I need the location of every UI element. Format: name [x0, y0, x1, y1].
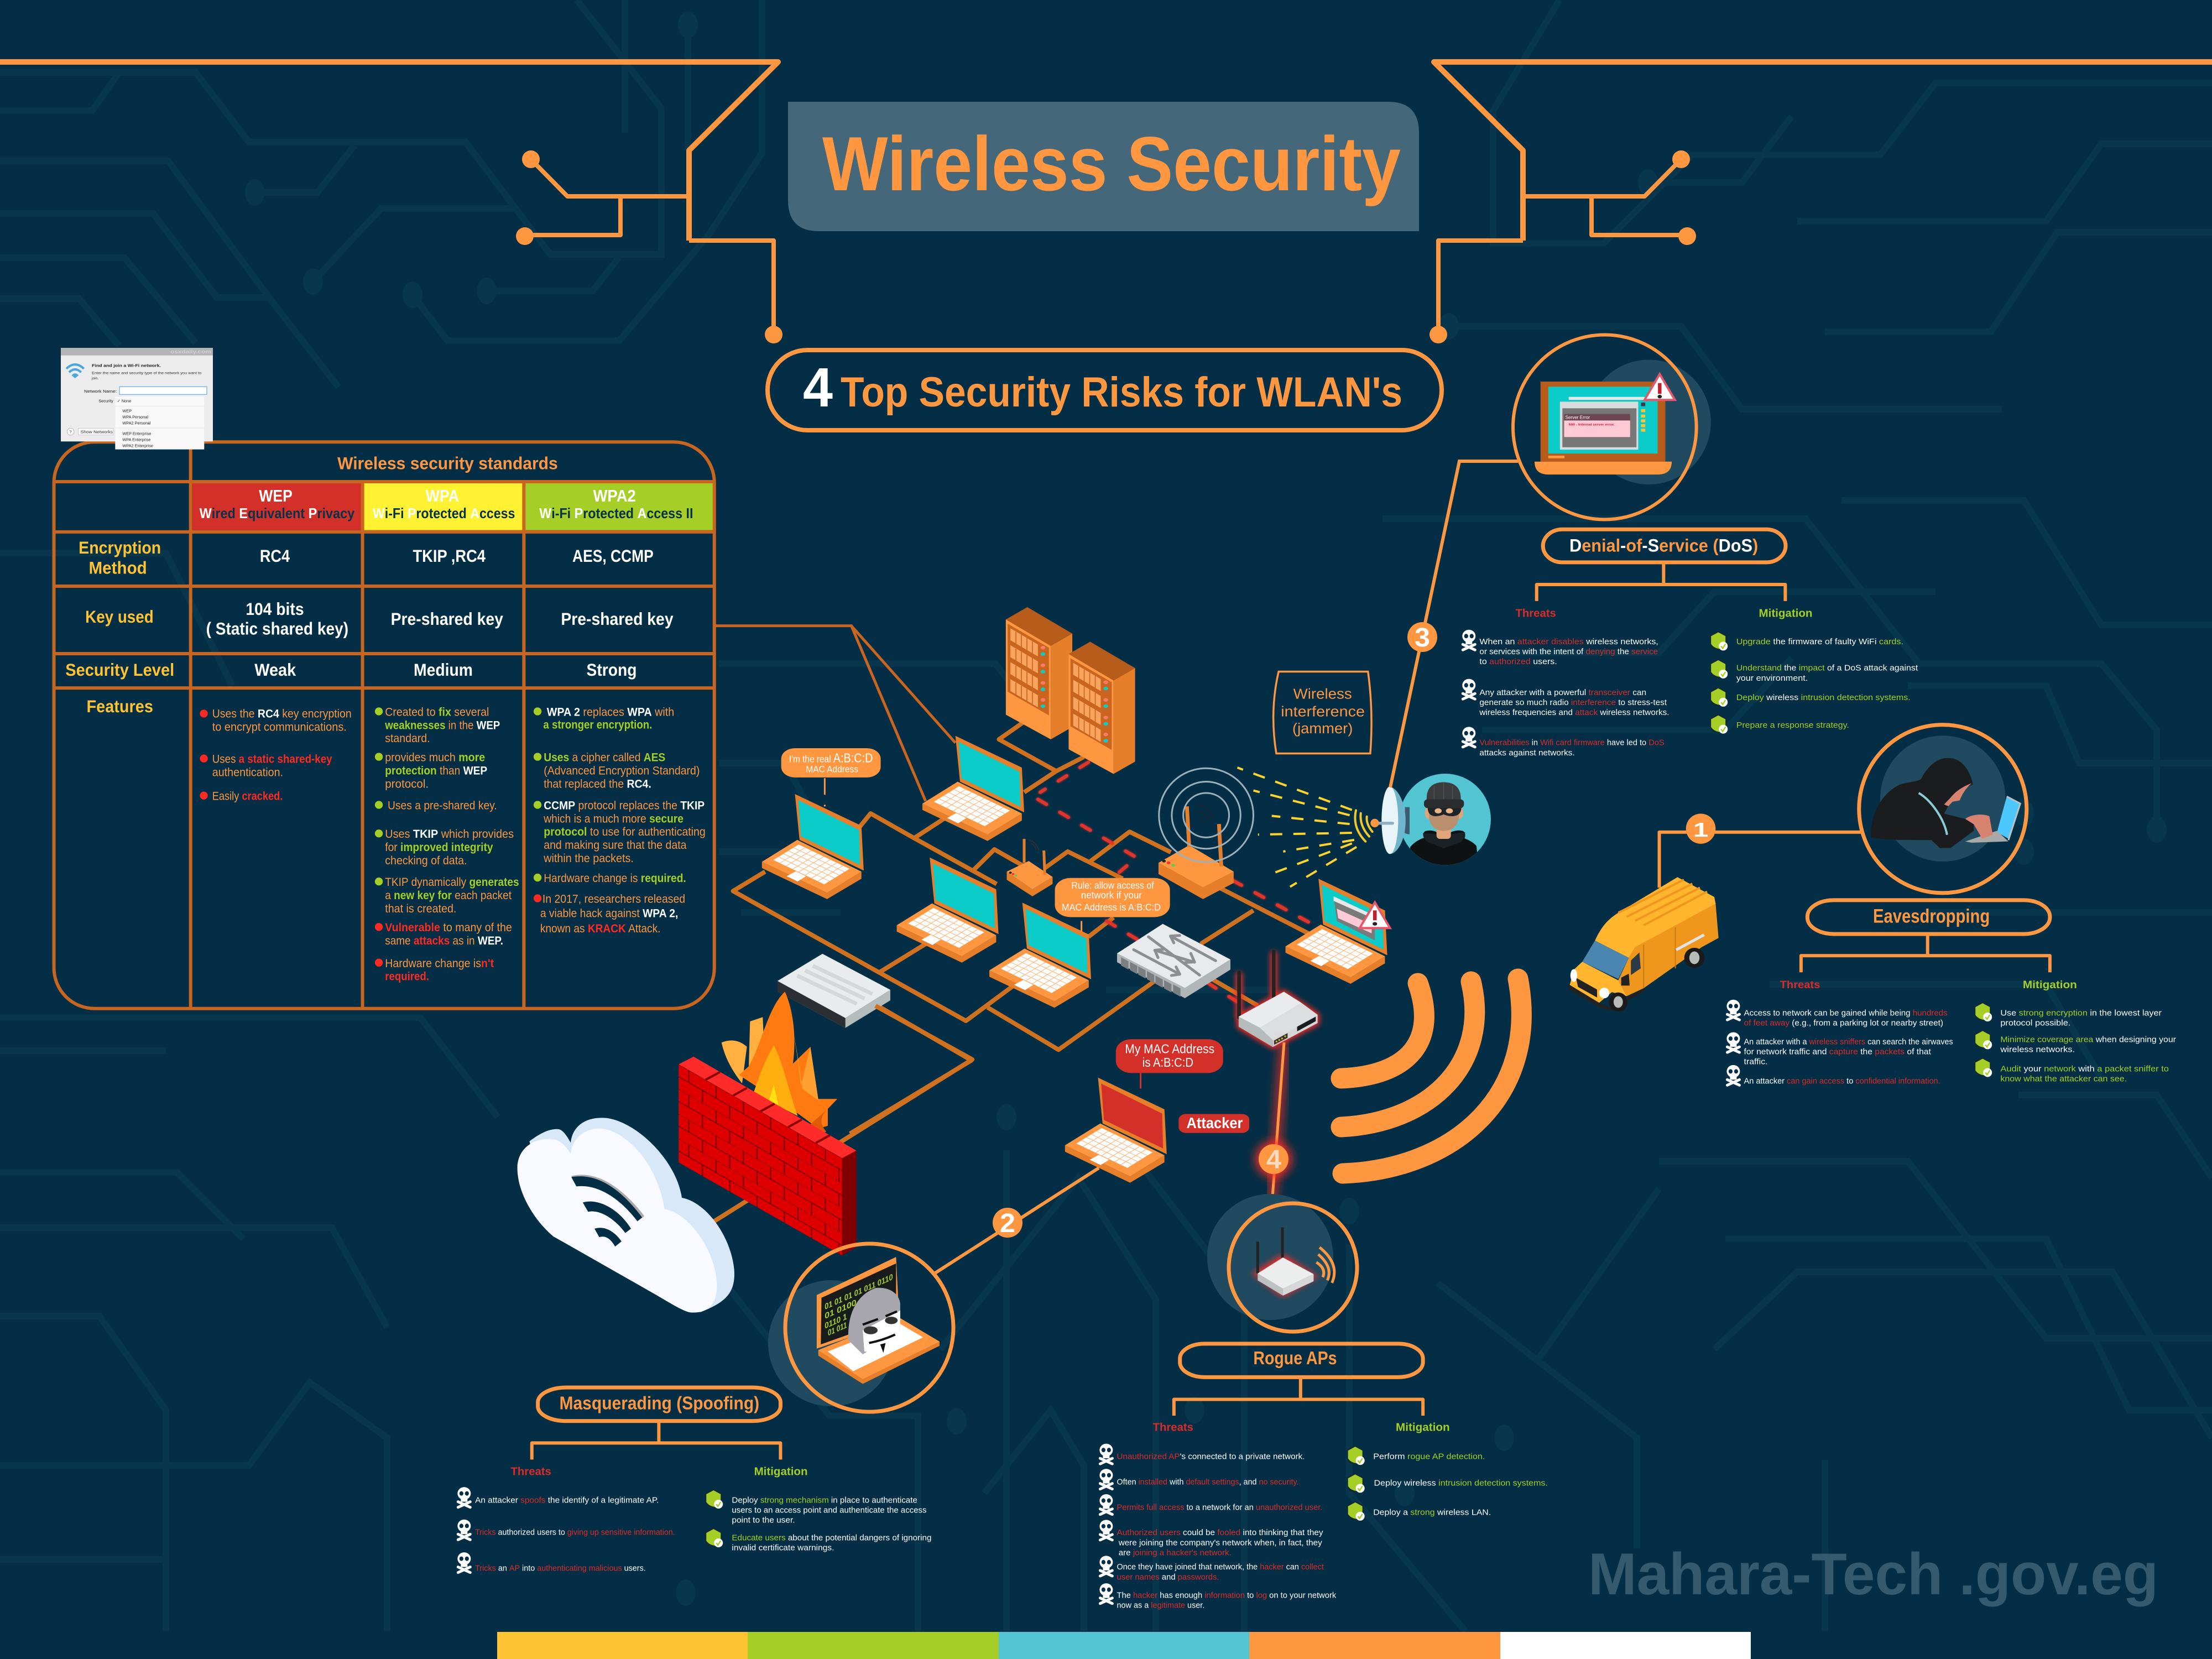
Rogue APs mitigation list: Deploy a strong wireless LAN.: [1373, 1508, 1491, 1517]
subtitle: [768, 350, 1442, 430]
panel: wireless security standards table: [54, 442, 714, 1009]
jamming signal rays: [1237, 768, 1357, 887]
table heading: Wireless security standards: [337, 453, 558, 473]
speech bubble: firewall rule: [1055, 878, 1170, 932]
DoS icon: [1513, 335, 1711, 519]
WPA features: provides much more: [385, 750, 485, 764]
WPA features: protocol.: [385, 777, 429, 790]
screenshot: Mac Wi-Fi join dialog: Network Name:: [84, 389, 117, 394]
Eavesdropping tree connector: [1801, 934, 2050, 972]
WPA features: required.: [385, 970, 429, 983]
Rogue APs threats list: were joining the company's network when, in fact, they: [1118, 1538, 1322, 1547]
DoS threats list: or services with the intent of denying the service: [1479, 648, 1658, 656]
speech bubble: real MAC: I'm the real A:B:C:D: [789, 751, 873, 765]
bottom colour bar: [497, 1632, 1751, 1659]
WPA2 features: which is a much more secure: [543, 812, 684, 825]
hacker icon: [1859, 725, 2027, 893]
eavesdropping connector with badge 1: [1660, 813, 1861, 888]
screenshot: Mac Wi-Fi join dialog: ✓ None: [117, 398, 131, 403]
Masquerading tree connector: [532, 1421, 780, 1459]
Rogue APs threats list: Once they have joined that network, the hacker can collect: [1117, 1563, 1324, 1572]
DoS icon: Server Error: [1565, 415, 1590, 420]
Eavesdropping threats list: traffic.: [1744, 1057, 1767, 1066]
WPA2 features: In 2017, researchers released: [542, 892, 685, 905]
flames: [722, 992, 837, 1134]
Eavesdropping threats list: of feet away (e.g., from a parking lot or nearby street): [1744, 1019, 1943, 1027]
Eavesdropping threats list: Access to network can be gained while being hundreds: [1744, 1009, 1948, 1018]
WPA2 features: and making sure that the data: [544, 838, 687, 852]
WPA features: for improved integrity: [385, 841, 493, 854]
wire to firewall: [713, 1006, 972, 1222]
Rogue APs heading: [1180, 1344, 1423, 1377]
row labels: [65, 538, 174, 716]
Rogue APs threats list: Authorized users could be fooled into thinking that they: [1117, 1528, 1323, 1537]
WPA features: weaknesses in the WEP: [384, 718, 500, 732]
Rogue APs threats list: Permits full access to a network for an unauthorized user.: [1117, 1503, 1322, 1512]
screenshot: Mac Wi-Fi join dialog: [61, 348, 213, 450]
WPA2 features: WPA 2 replaces WPA with: [547, 705, 674, 718]
DoS threats list: [1462, 630, 1670, 758]
victim laptop with warning: [1286, 879, 1390, 984]
WPA features: protection than WEP: [385, 764, 487, 777]
row values: [206, 546, 674, 680]
DoS mitigation list: Understand the impact of a DoS attack against: [1736, 664, 1918, 672]
row values: Strong: [587, 660, 637, 680]
screenshot: Mac Wi-Fi join dialog: WPA2 Personal: [122, 421, 151, 426]
right circuit header decoration: [1430, 62, 2212, 343]
WPA features: checking of data.: [385, 854, 467, 867]
WEP features: Uses a static shared-key: [212, 753, 332, 766]
DoS threats list: When an attacker disables wireless networks,: [1479, 638, 1658, 646]
laptop with anonymous mask: [817, 1257, 940, 1384]
threats heading: Threats: [1780, 979, 1820, 990]
brick firewall: [679, 1057, 857, 1255]
screenshot: Mac Wi-Fi join dialog: WEP Enterprise: [122, 431, 151, 436]
panel: Masquerading (Spoofing): [457, 1387, 931, 1573]
screenshot: Mac Wi-Fi join dialog: ?: [70, 429, 72, 434]
threats heading: Threats: [511, 1465, 551, 1478]
WPA features: Uses TKIP which provides: [385, 827, 514, 841]
Eavesdropping mitigation list: wireless networks.: [2000, 1045, 2075, 1054]
WPA2 header: Wi-Fi Protected Access II: [539, 506, 693, 521]
attacker speech bubble: [1116, 1039, 1223, 1088]
jammer operator with dish: [1355, 774, 1491, 867]
Masquerading mitigation list: users to an access point and authenticate the access: [732, 1506, 926, 1515]
subtitle: Top Security Risks for WLAN's: [841, 369, 1402, 416]
Eavesdropping heading: [1807, 900, 2050, 934]
DoS mitigation list: Upgrade the firmware of faulty WiFi cards.: [1736, 638, 1903, 646]
attacker connector with badge 2: 2: [1000, 1209, 1015, 1238]
screenshot: Mac Wi-Fi join dialog: Enter the name and security type of the network you want to: [92, 372, 202, 375]
WPA features: Hardware change isn't: [385, 957, 494, 970]
DoS heading: Denial-of-Service (DoS): [1569, 535, 1758, 556]
mini rogue router: [1253, 1227, 1334, 1297]
laptop: [989, 902, 1091, 1008]
Eavesdropping mitigation list: protocol possible.: [2000, 1019, 2070, 1027]
Masquerading mitigation list: invalid certificate warnings.: [732, 1543, 834, 1552]
speech bubble: firewall rule: Rule: allow access of: [1071, 880, 1154, 891]
WEP features: Uses the RC4 key encryption: [212, 707, 352, 721]
mitigation heading: Mitigation: [754, 1465, 808, 1478]
WPA features: Created to fix several: [385, 705, 489, 718]
red attack path dashes: [1038, 762, 1313, 1009]
firewall and cloud: [518, 992, 972, 1313]
WPA header: [373, 487, 515, 521]
row values: Pre-shared key: [391, 609, 503, 629]
WPA2 features: Uses a cipher called AES: [544, 750, 665, 764]
rogue AP icon: [1207, 1194, 1357, 1332]
Masquerading mitigation list: point to the user.: [732, 1516, 795, 1525]
DoS threats list: to authorized users.: [1479, 658, 1557, 666]
Masquerading heading: Masquerading (Spoofing): [560, 1392, 759, 1413]
WPA2 features: Hardware change is required.: [544, 872, 686, 885]
WPA2 features: known as KRACK Attack.: [540, 922, 660, 935]
WEP features: to encrypt communications.: [212, 720, 347, 733]
network switch: [1117, 924, 1230, 998]
screenshot: Mac Wi-Fi join dialog: WPA2 Enterprise: [122, 443, 153, 448]
small router: [1007, 839, 1052, 896]
DoS threats list: Vulnerabilities in Wifi card firmware have led to DoS: [1479, 739, 1665, 747]
WPA2 features: protocol to use for authenticating: [544, 825, 706, 838]
rogue connector with badge 4: [1256, 1042, 1291, 1204]
wireless interference jammer label: [1274, 672, 1371, 754]
attacker laptop: [1065, 1078, 1167, 1183]
WPA features: same attacks as in WEP.: [385, 934, 503, 947]
row values: AES, CCMP: [572, 546, 654, 566]
Eavesdropping mitigation list: [1974, 1001, 2176, 1083]
screenshot: Mac Wi-Fi join dialog: WPA Personal: [122, 415, 148, 420]
Masquerading heading: [538, 1387, 780, 1421]
DoS threats list: Any attacker with a powerful transceiver can: [1479, 688, 1646, 697]
DoS mitigation list: [1709, 630, 1918, 734]
delivery van: [1569, 877, 1719, 1012]
DoS threats list: attacks against networks.: [1479, 749, 1575, 758]
speech bubble: firewall rule: network if your: [1081, 890, 1142, 901]
attacker label: Attacker: [1186, 1114, 1243, 1131]
Rogue APs mitigation list: Deploy wireless intrusion detection systems.: [1374, 1479, 1548, 1488]
WPA features: TKIP dynamically generates: [385, 875, 519, 889]
screenshot: Mac Wi-Fi join dialog: Show Networks: [81, 429, 113, 434]
laptop: [762, 794, 864, 899]
laptop with anonymous mask: 01 011: [828, 1319, 847, 1338]
WPA2 features: within the packets.: [543, 852, 634, 865]
laptop with anonymous mask: 01 01 01 01 011 0110: [825, 1271, 893, 1312]
mitigation heading: Mitigation: [1759, 607, 1812, 619]
Eavesdropping mitigation list: Minimize coverage area when designing your: [2000, 1035, 2176, 1044]
Rogue APs threats list: Often installed with default settings, and no security.: [1117, 1478, 1299, 1486]
wireless interference jammer label: interference: [1281, 704, 1365, 720]
screenshot: Mac Wi-Fi join dialog: WPA Enterprise: [122, 437, 151, 442]
Eavesdropping mitigation list: Audit your network with a packet sniffer to: [2000, 1065, 2169, 1073]
WPA2 features: a stronger encryption.: [543, 718, 652, 731]
speech bubble: real MAC: MAC Address: [806, 765, 858, 775]
Rogue APs heading: Rogue APs: [1253, 1348, 1337, 1368]
big orange wifi waves: [1341, 979, 1521, 1173]
WPA features: Vulnerable to many of the: [385, 921, 512, 934]
Rogue APs threats list: [1099, 1444, 1337, 1610]
Eavesdropping threats list: An attacker with a wireless sniffers can search the airwaves: [1744, 1037, 1953, 1046]
masked man: [1410, 782, 1478, 867]
WPA features: [375, 705, 519, 983]
mitigation heading: Mitigation: [1396, 1421, 1450, 1433]
WPA header: Wi-Fi Protected Access: [373, 506, 515, 521]
Rogue APs tree connector: [1174, 1378, 1423, 1416]
Rogue APs threats list: The hacker has enough information to log on to your network: [1117, 1591, 1337, 1600]
panel: Eavesdropping: [1569, 725, 2176, 1086]
Eavesdropping threats list: An attacker can gain access to confidential information.: [1744, 1077, 1940, 1086]
screenshot: Mac Wi-Fi join dialog: Security: [98, 398, 113, 403]
row labels: Features: [87, 696, 153, 716]
WPA2 features: [534, 705, 706, 935]
row labels: Key used: [85, 607, 154, 627]
laptop: [922, 736, 1024, 841]
server racks: [1006, 607, 1135, 774]
Eavesdropping threats list: for network traffic and capture the packets of that: [1744, 1047, 1931, 1056]
WEP header: Wired Equivalent Privacy: [200, 506, 355, 521]
row values: TKIP ,RC4: [413, 546, 486, 566]
Rogue APs threats list: now as a legitimate user.: [1117, 1601, 1204, 1610]
WPA features: Uses a pre-shared key.: [388, 799, 497, 812]
attacker speech bubble: is A:B:C:D: [1142, 1055, 1193, 1070]
row values: Medium: [414, 660, 473, 680]
laptop with anonymous mask: 0110 1: [825, 1311, 847, 1331]
speech bubble: real MAC: [781, 748, 881, 806]
threats heading: Threats: [1153, 1421, 1193, 1433]
cloud icon: [518, 1118, 734, 1313]
WPA header: WPA: [426, 487, 459, 505]
spoofing icon: [768, 1244, 953, 1412]
rogue router: [1239, 952, 1318, 1047]
title: [788, 102, 1419, 231]
left circuit header decoration: [0, 62, 782, 343]
WEP header: [200, 487, 355, 521]
DoS heading: [1543, 529, 1786, 562]
wireless interference jammer label: Wireless: [1293, 686, 1352, 702]
Masquerading mitigation list: Deploy strong mechanism in place to authenticate: [732, 1495, 917, 1505]
attacker label: [1178, 1114, 1249, 1133]
DoS icon: 500 - Internal server error.: [1569, 424, 1615, 427]
panel: Rogue APs: [1099, 1344, 1548, 1610]
DoS connector with badge 3: [1390, 461, 1518, 787]
Rogue APs threats list: are joining a hacker's network.: [1119, 1548, 1232, 1557]
DoS connector with badge 3: 3: [1415, 623, 1430, 653]
speech bubble: firewall rule: MAC Address is A:B:C:D: [1062, 902, 1161, 913]
DoS mitigation list: Deploy wireless intrusion detection systems.: [1736, 693, 1911, 702]
laptop: [897, 858, 999, 963]
DoS tree connector: [1537, 562, 1785, 601]
Rogue APs threats list: user names and passwords.: [1117, 1573, 1219, 1582]
table grid: [54, 442, 714, 1009]
rogue connector with badge 4: 4: [1266, 1145, 1281, 1175]
row labels: Method: [89, 558, 147, 578]
screenshot: Mac Wi-Fi join dialog: osxdaily.com: [170, 349, 211, 354]
WPA features: that is created.: [385, 902, 456, 915]
mitigation heading: Mitigation: [2023, 979, 2077, 990]
WPA2 header: WPA2: [593, 487, 636, 505]
WPA features: a new key for each packet: [385, 889, 512, 902]
screenshot: Mac Wi-Fi join dialog: join.: [91, 377, 98, 380]
panel: Denial-of-Service: [1462, 335, 1918, 758]
Eavesdropping mitigation list: Use strong encryption in the lowest layer: [2000, 1009, 2162, 1018]
Rogue APs mitigation list: [1347, 1445, 1548, 1521]
WEP features: [200, 707, 352, 803]
WPA2 features: that replaced the RC4.: [544, 777, 651, 790]
row values: Weak: [254, 660, 296, 680]
eavesdropping connector with badge 1: 1: [1693, 819, 1708, 841]
WPA features: standard.: [385, 732, 430, 745]
Rogue APs mitigation list: Perform rogue AP detection.: [1373, 1452, 1485, 1461]
WPA2 features: CCMP protocol replaces the TKIP: [544, 799, 705, 812]
subtitle: 4: [803, 357, 833, 419]
WEP features: Easily cracked.: [212, 790, 283, 803]
DoS threats list: wireless frequencies and attack wireless networks.: [1479, 708, 1670, 717]
row values: RC4: [260, 546, 290, 566]
attacker speech bubble: My MAC Address: [1125, 1042, 1214, 1056]
Eavesdropping mitigation list: know what the attacker can see.: [2000, 1074, 2127, 1083]
row labels: Security Level: [65, 660, 174, 680]
DoS mitigation list: Prepare a response strategy.: [1736, 721, 1849, 730]
Masquerading threats list: [457, 1487, 675, 1573]
Eavesdropping threats list: [1726, 1000, 1953, 1086]
screenshot: Mac Wi-Fi join dialog: WEP: [122, 408, 132, 413]
table header cells: [192, 483, 713, 530]
laptop with anonymous mask: 01 0100: [825, 1297, 857, 1321]
row values: ( Static shared key): [206, 619, 348, 639]
WPA2 features: (Advanced Encryption Standard): [544, 764, 700, 777]
modem: [778, 954, 890, 1028]
WEP features: authentication.: [212, 766, 283, 779]
WPA2 features: a viable hack against WPA 2,: [540, 907, 678, 920]
DoS mitigation list: your environment.: [1736, 674, 1808, 683]
row labels: Encryption: [79, 538, 161, 557]
wireless interference jammer label: (jammer): [1292, 721, 1353, 737]
row values: 104 bits: [246, 599, 304, 619]
attacker connector with badge 2: [933, 1168, 1099, 1274]
Masquerading mitigation list: Educate users about the potential dangers of ignoring: [732, 1533, 931, 1542]
connection from table to laptop: [715, 626, 956, 801]
threats heading: Threats: [1515, 607, 1556, 619]
watermark: Mahara-Tech .gov.eg: [1588, 1541, 2158, 1607]
Masquerading threats list: Tricks an AP into authenticating malicious users.: [475, 1564, 646, 1573]
Eavesdropping heading: Eavesdropping: [1873, 905, 1990, 927]
Masquerading mitigation list: [705, 1489, 931, 1552]
network diagram: [715, 607, 1390, 1134]
Masquerading threats list: An attacker spoofs the identify of a legitimate AP.: [475, 1495, 659, 1505]
screenshot: Mac Wi-Fi join dialog: Find and join a Wi-Fi network.: [92, 363, 161, 368]
access point router with signal rings: [1159, 768, 1254, 899]
title: Wireless Security: [822, 121, 1401, 207]
row values: Pre-shared key: [561, 609, 674, 629]
Masquerading threats list: Tricks authorized users to giving up sensitive information.: [475, 1528, 675, 1537]
WPA2 header: [539, 487, 693, 521]
WEP header: WEP: [259, 487, 293, 505]
network wires: [733, 722, 1308, 1134]
Rogue APs threats list: Unauthorized AP's connected to a private network.: [1117, 1452, 1305, 1461]
DoS threats list: generate so much radio interference to stress-test: [1479, 698, 1667, 707]
